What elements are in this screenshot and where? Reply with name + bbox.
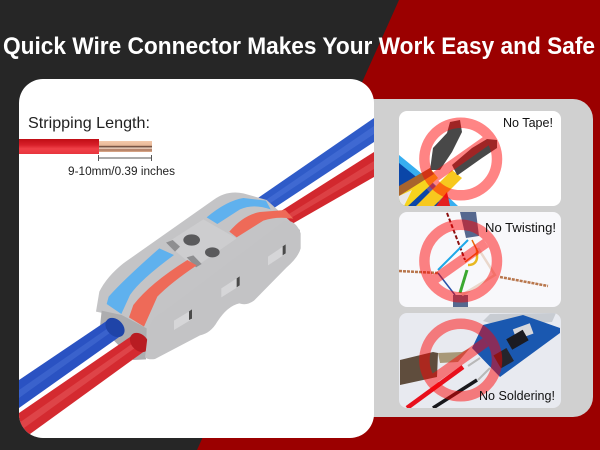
stripped wire	[19, 139, 152, 154]
blue lever back	[207, 198, 271, 224]
icon: prohibition sign no soldering	[424, 324, 497, 396]
stripping length label: Stripping Length:	[28, 115, 150, 132]
icon: prohibition sign no tape	[424, 123, 497, 195]
background: red diagonal	[197, 0, 600, 450]
connector front face	[145, 221, 301, 359]
connector	[19, 192, 301, 434]
dimension text: 9-10mm/0.39 inches	[68, 166, 175, 178]
card: no tape	[399, 111, 561, 206]
red lever front	[129, 260, 197, 327]
label: no tape: No Tape!	[503, 116, 553, 130]
card: no twisting	[399, 212, 561, 307]
dimension bracket	[98, 155, 152, 161]
panel: white product panel	[19, 79, 374, 438]
label: no soldering: No Soldering!	[479, 389, 555, 403]
red lever back	[229, 210, 293, 237]
upper wires	[255, 118, 374, 228]
panel: gray no-tools panel	[374, 99, 593, 417]
label: no twisting: No Twisting!	[485, 221, 556, 235]
screw holes	[183, 234, 200, 246]
icon: prohibition sign no twisting	[424, 225, 497, 297]
card: no soldering	[399, 313, 561, 408]
lower wires	[19, 314, 153, 434]
connector end shading	[100, 311, 147, 360]
blue lever front	[107, 248, 174, 314]
connector top body	[96, 192, 300, 357]
side slots	[174, 244, 286, 330]
connector center block	[166, 219, 237, 267]
